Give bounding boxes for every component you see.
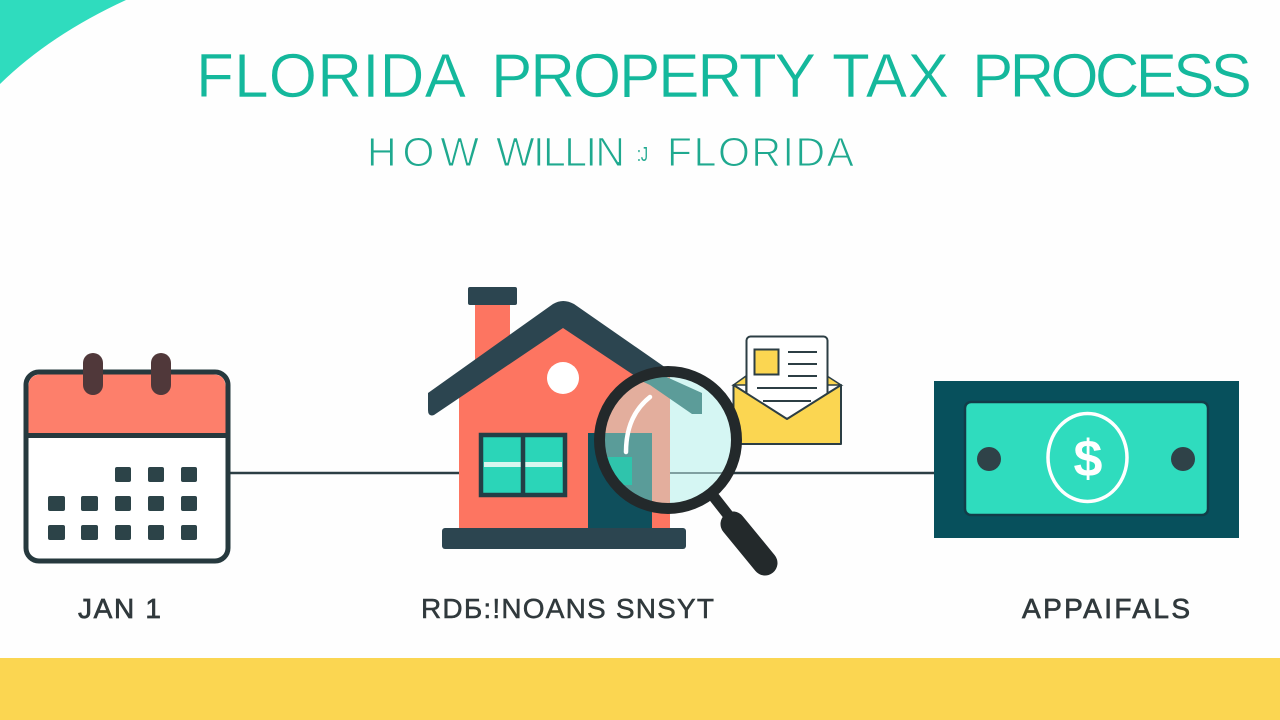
icon: dollar bill	[934, 381, 1239, 538]
label: appeals: APPAIFALS	[1022, 593, 1190, 624]
label: Jan 1: JAN 1	[78, 593, 161, 624]
label: middle step: RDБ:!NOANS SNSYT	[421, 593, 714, 624]
icon: house	[428, 287, 702, 549]
icon: magnifying glass	[600, 365, 765, 563]
subtitle: WILLIN	[496, 129, 625, 175]
icon: calendar	[26, 353, 228, 561]
title: TAX	[832, 42, 949, 111]
subtitle: FLORIDA	[667, 129, 855, 175]
icon: dollar bill: $	[1074, 430, 1103, 488]
subtitle	[367, 129, 855, 175]
subtitle: :J	[637, 144, 648, 166]
title: PROPERTY	[491, 42, 816, 111]
icon: envelope with letter	[734, 336, 841, 444]
title	[196, 42, 1252, 111]
subtitle: HOW	[367, 129, 479, 175]
timeline connector line	[230, 472, 936, 474]
footer band	[0, 658, 1280, 720]
title: PROCESS	[972, 42, 1252, 111]
decorative corner shape	[0, 0, 126, 84]
title: FLORIDA	[196, 42, 467, 111]
